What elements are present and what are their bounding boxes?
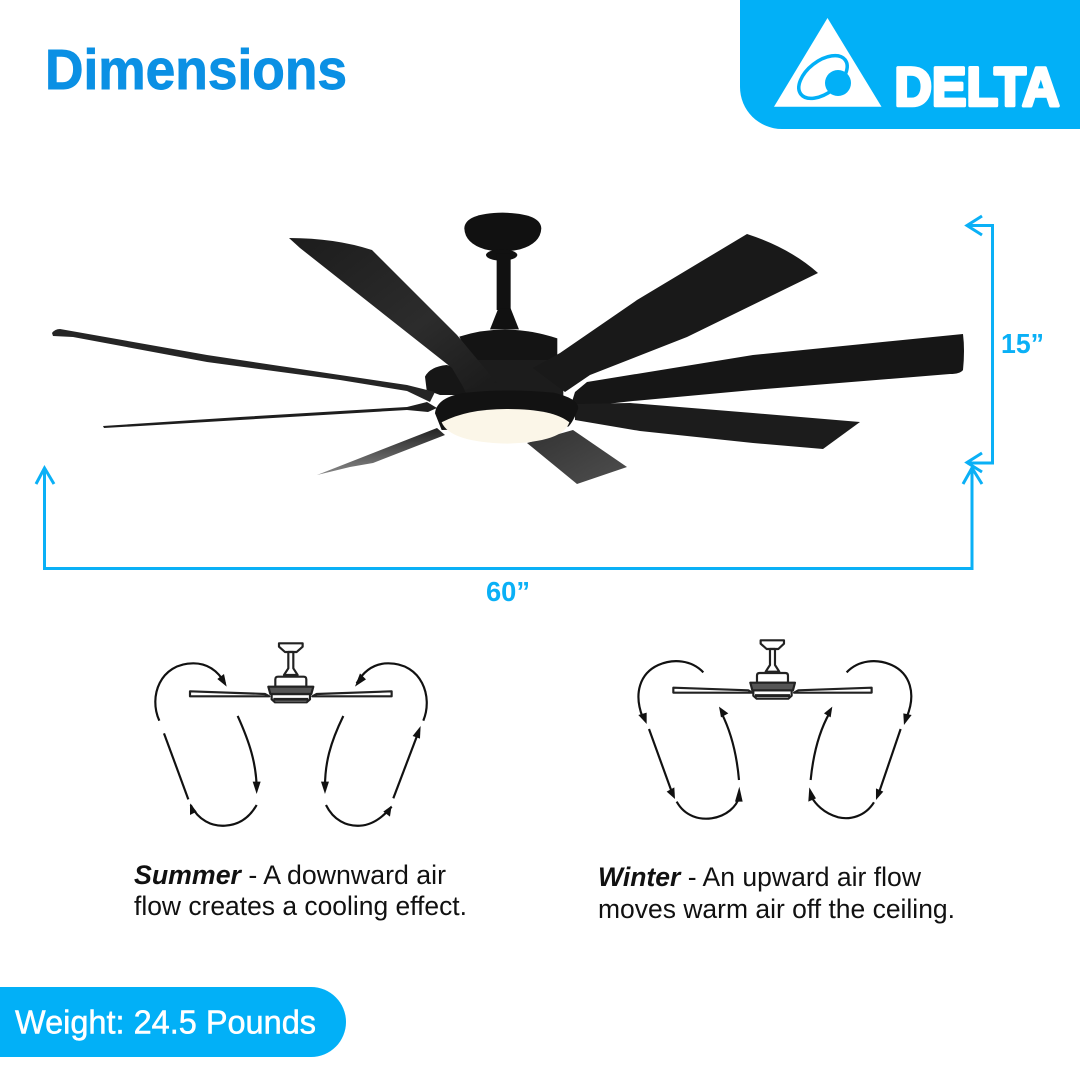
title: Dimensions — [45, 38, 347, 102]
icon: delta triangle — [774, 18, 882, 107]
height label: 15” — [1001, 328, 1044, 359]
fan canopy and downrod — [425, 213, 563, 397]
summer caption: Summer - A downward air — [134, 860, 446, 890]
dimension: height 15 inches — [967, 216, 1044, 472]
weight label: Weight: 24.5 Pounds — [15, 1004, 316, 1040]
small fan: winter — [673, 640, 872, 699]
summer caption — [134, 860, 467, 921]
winter airflow diagram — [638, 640, 912, 819]
logo panel — [740, 0, 1080, 129]
airflow arrows: summer — [155, 663, 427, 826]
winter caption: Winter - An upward air flow — [598, 862, 921, 892]
logo wordmark: DELTA — [894, 55, 1060, 117]
fan light housing — [435, 390, 578, 444]
summer airflow diagram — [155, 643, 427, 826]
summer caption: flow creates a cooling effect. — [134, 891, 467, 921]
airflow arrows: winter — [638, 661, 912, 819]
winter caption — [598, 862, 955, 924]
ceiling fan photo — [52, 213, 964, 484]
winter caption: moves warm air off the ceiling. — [598, 894, 955, 924]
dimension: width 60 inches — [36, 468, 982, 607]
width label: 60” — [486, 576, 530, 607]
fan blades — [52, 234, 964, 484]
small fan: summer — [190, 643, 392, 702]
weight badge — [0, 987, 346, 1057]
